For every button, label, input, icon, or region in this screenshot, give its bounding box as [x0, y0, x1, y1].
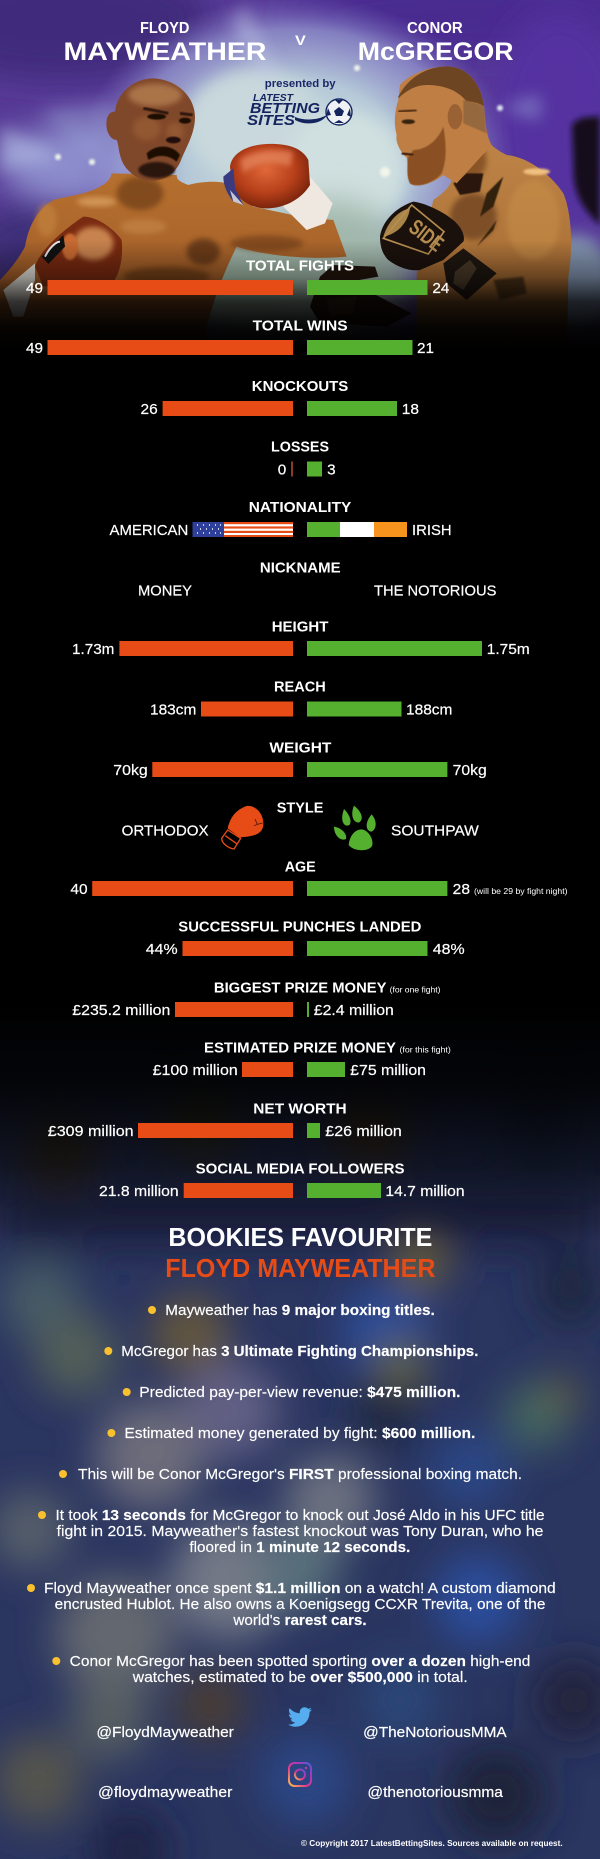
stat: style: ORTHODOX — [122, 822, 209, 840]
copyright footer: © Copyright 2017 LatestBettingSites. Sources available on request. — [301, 1839, 563, 1848]
stat: weight — [113, 740, 487, 779]
torso — [417, 132, 571, 360]
head — [395, 66, 492, 185]
stat: reach: 183cm — [150, 702, 196, 718]
stat: height: HEIGHT — [272, 618, 328, 636]
presented by logo: presented by — [265, 78, 337, 90]
heading: bookies favourite: FLOYD MAYWEATHER — [165, 1255, 436, 1283]
fact: fastest knockouts: It took 13 seconds for McGregor to knock out José Aldo in his UFC title — [56, 1508, 545, 1524]
hair — [398, 66, 484, 107]
raised red glove — [230, 144, 310, 208]
header title: McGREGOR — [358, 38, 514, 66]
stat: nationality: NATIONALITY — [249, 499, 351, 516]
fact: McGregor watches — [52, 1654, 530, 1686]
stat: estimated prize money: ESTIMATED PRIZE MONEY — [204, 1040, 396, 1056]
stat: estimated prize money — [153, 1040, 451, 1079]
stat: social media followers — [99, 1160, 465, 1200]
stat: nationality — [110, 499, 452, 539]
stat: net worth: £26 million — [325, 1123, 402, 1140]
stat: total wins — [26, 318, 434, 357]
stat: net worth: £309 million — [48, 1123, 134, 1140]
twitter handles — [96, 1724, 507, 1741]
stat: social media followers: 14.7 million — [385, 1183, 465, 1200]
presented by logo: SITES — [247, 112, 295, 129]
stat: total fights: 49 — [26, 280, 43, 297]
stage light rays — [0, 5, 540, 172]
stat: style: SOUTHPAW — [391, 822, 480, 840]
fighter: Floyd Mayweather — [0, 78, 347, 360]
heading: bookies favourite: BOOKIES FAVOURITE — [168, 1224, 432, 1252]
heading: bookies favourite — [165, 1224, 436, 1283]
beard — [407, 127, 446, 185]
instagram handles: @floydmayweather — [98, 1784, 232, 1801]
stat: knockouts: KNOCKOUTS — [252, 378, 348, 395]
icon: american flag bar — [192, 522, 293, 537]
presented by logo: LATEST — [253, 92, 295, 104]
stat: biggest prize money: BIGGEST PRIZE MONEY — [214, 980, 386, 996]
hand wrap — [283, 170, 333, 230]
stat: net worth — [48, 1100, 402, 1140]
stat: reach: REACH — [274, 678, 326, 696]
presented by logo — [247, 78, 352, 129]
stat: total wins: 21 — [417, 340, 434, 357]
header title: V — [295, 32, 307, 48]
fact: Mayweather watch and car: Floyd Mayweather once spent $1.1 million on a watch! A custom diamond — [44, 1581, 556, 1597]
stat: losses — [271, 438, 336, 478]
twitter handles: @FloydMayweather — [96, 1724, 234, 1741]
fact: first boxing match: This will be Conor McGregor's FIRST professional boxing match. — [78, 1467, 522, 1483]
stat: social media followers: SOCIAL MEDIA FOLLOWERS — [196, 1160, 404, 1178]
fact: Mayweather watch and car: encrusted Hublot. He also owns a Koenigsegg CCXR Trevita, one of the — [55, 1597, 545, 1613]
torso and arm — [0, 173, 347, 360]
header title — [64, 20, 514, 66]
stat: successful punches landed — [146, 918, 465, 958]
instagram handles: @thenotoriousmma — [367, 1784, 504, 1801]
stat: reach — [150, 678, 452, 718]
stat: age: (will be 29 by fight night) — [474, 887, 568, 896]
stat: estimated prize money: £100 million — [153, 1062, 238, 1079]
stat: knockouts — [140, 378, 419, 418]
hero fade to black — [0, 240, 600, 381]
fact: Mayweather watch and car — [27, 1581, 556, 1629]
presented by logo: BETTING — [250, 100, 320, 117]
right side dark silhouette — [572, 116, 600, 225]
stat: height: 1.73m — [72, 641, 114, 658]
stat: nickname: MONEY — [138, 582, 192, 600]
stat: style: STYLE — [277, 800, 323, 816]
stat: successful punches landed: 44% — [146, 941, 178, 958]
hero stage photo background — [0, 0, 600, 350]
stat: biggest prize money: £2.4 million — [314, 1002, 394, 1019]
stat: estimated prize money: (for this fight) — [400, 1046, 451, 1054]
fact: Mayweather watch and car: world's rarest cars. — [232, 1613, 367, 1629]
stat: nationality: AMERICAN — [110, 522, 188, 539]
fact: boxing titles: Mayweather has 9 major boxing titles. — [165, 1303, 435, 1319]
stat: knockouts: 18 — [402, 401, 419, 418]
stat: age — [70, 858, 568, 898]
header title: CONOR — [407, 20, 463, 37]
stat: biggest prize money: £235.2 million — [72, 1002, 170, 1019]
stat: nationality: IRISH — [412, 522, 452, 539]
lower glove — [35, 217, 122, 287]
stat: weight: 70kg — [453, 762, 487, 779]
stat: biggest prize money — [72, 980, 441, 1019]
fact list — [27, 1303, 556, 1686]
stat: losses: LOSSES — [271, 438, 329, 456]
stat: weight: 70kg — [113, 762, 148, 779]
stat: nickname — [138, 560, 496, 600]
fact: McGregor watches: Conor McGregor has been spotted sporting over a dozen high-end — [70, 1654, 530, 1670]
stat: weight: WEIGHT — [269, 740, 331, 756]
fact: fastest knockouts: fight in 2015. Mayweather's fastest knockout was Tony Duran, who he — [57, 1524, 543, 1540]
head — [106, 78, 195, 181]
fact: McGregor watches: watches, estimated to be over $500,000 in total. — [132, 1670, 468, 1686]
stat: height: 1.75m — [487, 641, 530, 658]
icon: instagram — [289, 1763, 311, 1786]
stat: biggest prize money: (for one fight) — [390, 986, 441, 994]
stat: total fights — [26, 258, 449, 297]
icon: twitter bird — [288, 1707, 312, 1727]
header title: MAYWEATHER — [64, 38, 266, 66]
stat: age: 28 — [453, 881, 470, 898]
twitter handles: @TheNotoriousMMA — [363, 1724, 507, 1741]
stat: social media followers: 21.8 million — [99, 1183, 179, 1200]
stat: nickname: NICKNAME — [260, 560, 341, 576]
stat: style — [122, 800, 480, 850]
stat: height — [72, 618, 530, 658]
icon: irish flag bar — [307, 522, 407, 537]
stat: knockouts: 26 — [140, 401, 158, 418]
stat: age: 40 — [70, 881, 88, 898]
fighter: Conor McGregor — [310, 66, 571, 360]
stat: successful punches landed: SUCCESSFUL PUNCHES LANDED — [178, 918, 422, 936]
chest tattoos — [453, 173, 483, 195]
stat: age: AGE — [285, 858, 316, 876]
stat: total fights: TOTAL FIGHTS — [246, 258, 354, 274]
stat: reach: 188cm — [406, 702, 452, 718]
stat: losses: 0 — [278, 462, 286, 478]
fact: money generated: Estimated money generated by fight: $600 million. — [124, 1426, 475, 1442]
blurred bokeh background — [0, 1000, 600, 1859]
fact: pay-per-view: Predicted pay-per-view revenue: $475 million. — [139, 1385, 460, 1401]
fact: UFC championships: McGregor has 3 Ultimate Fighting Championships. — [121, 1344, 478, 1360]
fact: fastest knockouts — [38, 1508, 545, 1556]
black gloves — [380, 202, 464, 270]
header title: FLOYD — [140, 20, 189, 37]
stat: nickname: THE NOTORIOUS — [374, 582, 496, 600]
stat: total wins: TOTAL WINS — [253, 318, 348, 334]
stat: total wins: 49 — [26, 340, 43, 357]
instagram handles — [98, 1784, 504, 1801]
fighter: Conor McGregor: SIDE — [404, 214, 449, 257]
icon: boxing glove — [222, 806, 263, 849]
stat: net worth: NET WORTH — [253, 1100, 347, 1118]
stat: successful punches landed: 48% — [433, 941, 465, 958]
stat: estimated prize money: £75 million — [350, 1062, 426, 1079]
icon: paw print — [334, 806, 376, 850]
stat: total fights: 24 — [432, 280, 449, 297]
fact: fastest knockouts: floored in 1 minute 12 seconds. — [189, 1540, 410, 1556]
stat: losses: 3 — [327, 462, 336, 478]
